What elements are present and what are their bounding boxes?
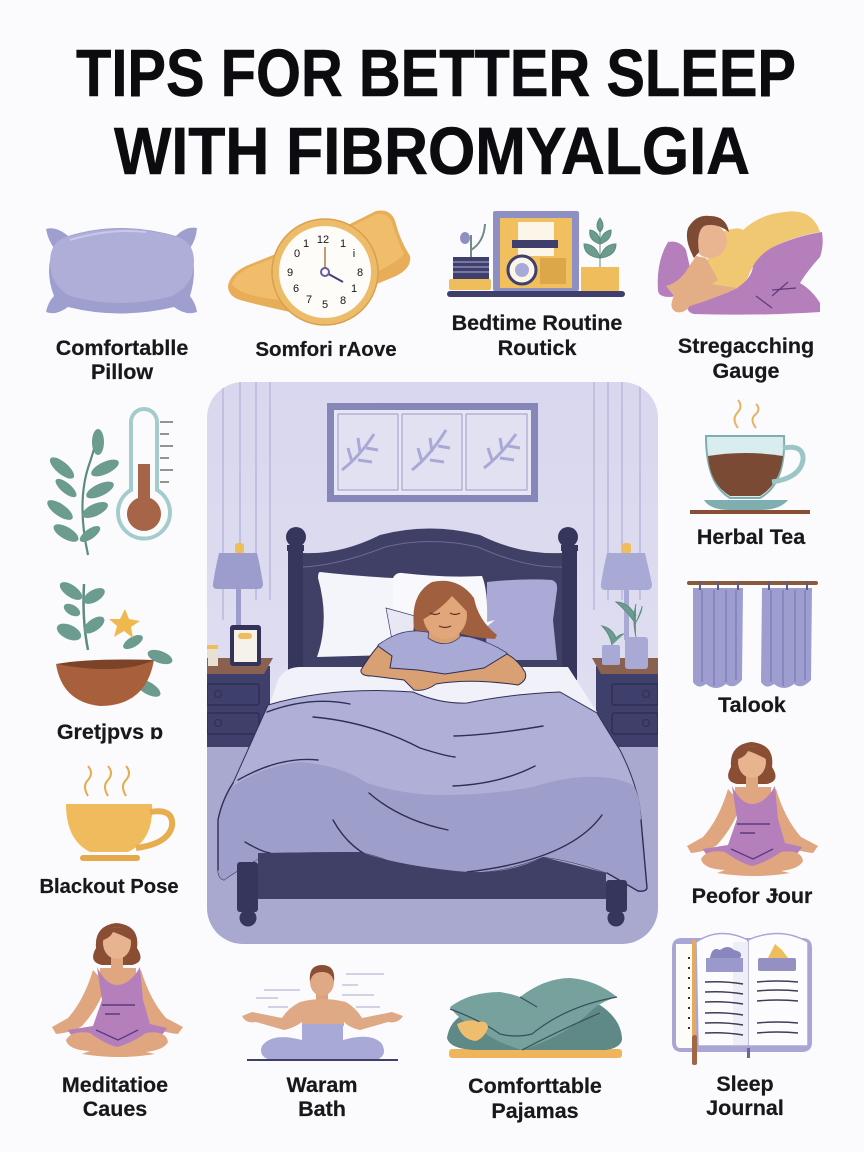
icon: bedtime shelf xyxy=(447,211,625,297)
icon: curtains xyxy=(687,581,818,688)
icon: meditating woman right xyxy=(687,742,818,876)
label: comfortable pajamas: Comforttable xyxy=(468,1074,602,1098)
icon: meditating woman left xyxy=(52,923,183,1057)
icon: wall clock on cushion: 6 xyxy=(293,283,299,295)
label: talook: Talook xyxy=(718,693,786,717)
icon: wall clock on cushion: 1 xyxy=(351,283,357,295)
right lamp xyxy=(601,543,652,640)
title xyxy=(76,36,796,189)
left lamp xyxy=(213,543,263,629)
label: meditatioe caues: Caues xyxy=(83,1097,147,1121)
icon: folded pajamas xyxy=(447,978,622,1058)
title: WITH FIBROMYALGIA xyxy=(114,114,750,189)
label: meditatioe caues: Meditatioe xyxy=(62,1073,168,1097)
pillows xyxy=(317,572,557,660)
icon: stretching woman xyxy=(658,211,823,315)
label: comfortable pillow: Comfortablle xyxy=(56,336,188,360)
label: bedtime routine: Routick xyxy=(498,336,576,360)
label: stretching gauge: Stregacching xyxy=(678,334,814,358)
label: herbal tea: Herbal Tea xyxy=(697,525,806,549)
label: gretpvs: Gretjpvs ɒ xyxy=(57,720,163,744)
icon: wall clock on cushion: 0 xyxy=(294,248,300,260)
sheet xyxy=(270,667,597,712)
icon: herb bowl with star xyxy=(54,579,174,706)
blanket xyxy=(218,691,647,891)
bed frame foot xyxy=(237,852,627,926)
picture frame xyxy=(327,403,538,502)
label: blackout pose: Blackout Pose xyxy=(39,876,179,898)
label: comfortable pajamas xyxy=(468,1074,602,1123)
icon: wall clock on cushion: 1 xyxy=(340,238,346,250)
label: bedtime routine: Bedtime Routine xyxy=(452,311,622,335)
label: sleep journal: Journal xyxy=(706,1096,784,1120)
icon: wall clock on cushion: 8 xyxy=(340,295,346,307)
nightstand left xyxy=(207,625,273,747)
label: comfortable pillow: Pillow xyxy=(91,360,153,384)
label: waram bath: Waram xyxy=(287,1073,357,1097)
label: stretching gauge xyxy=(678,334,814,383)
sleeping woman xyxy=(361,581,526,690)
icon: wall clock on cushion: 9 xyxy=(287,267,293,279)
label: bedtime routine xyxy=(452,311,622,360)
icon: herbal tea xyxy=(690,400,810,514)
icon: wall clock on cushion: 12 xyxy=(317,234,329,246)
icon: wall clock on cushion xyxy=(228,211,410,325)
icon: wall clock on cushion: i xyxy=(353,248,355,260)
label: somfori rave: Somfori rAove xyxy=(255,338,397,361)
icon: open sleep journal xyxy=(672,933,812,1065)
label: waram bath: Bath xyxy=(298,1097,346,1121)
icon: wall clock on cushion: 1 xyxy=(303,238,309,250)
icon: yellow cup xyxy=(66,766,172,861)
label: stretching gauge: Gauge xyxy=(713,359,779,383)
label: comfortable pajamas: Pajamas xyxy=(491,1099,579,1123)
icon: wall clock on cushion: 7 xyxy=(306,294,312,306)
icon: warm bath person xyxy=(242,965,403,1061)
nightstand right xyxy=(592,602,658,747)
label: meditatioe caues xyxy=(62,1073,168,1121)
panel: central bedroom scene xyxy=(207,382,658,944)
label: waram bath xyxy=(287,1073,357,1121)
headboard xyxy=(286,527,578,680)
icon: wall clock on cushion: 5 xyxy=(322,299,328,311)
label: sleep journal xyxy=(706,1072,784,1120)
icon: wall clock on cushion: 8 xyxy=(357,267,363,279)
label: sleep journal: Sleep xyxy=(716,1072,774,1096)
icon: pillow xyxy=(46,228,197,314)
label: peofor jour: Peofor Ɉour xyxy=(692,884,813,908)
icon: thermometer with leaves xyxy=(44,409,173,555)
label: comfortable pillow xyxy=(56,336,188,384)
